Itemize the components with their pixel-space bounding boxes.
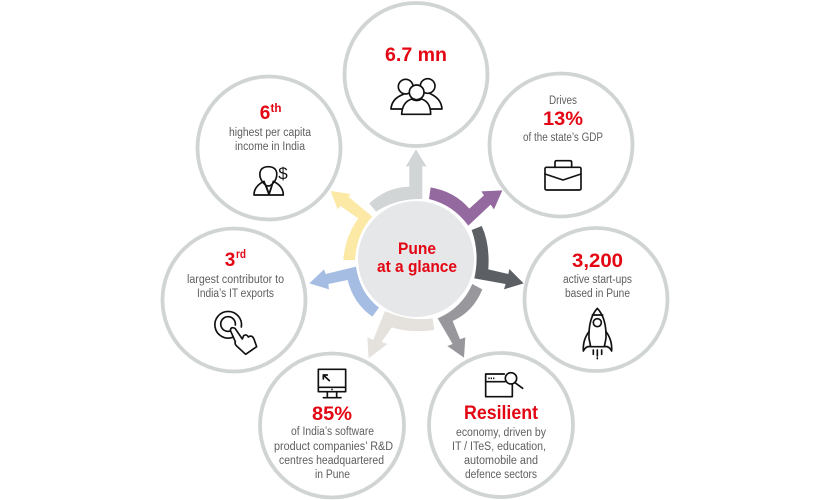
resilient text: automobile and bbox=[464, 455, 538, 467]
panel: GDP share bbox=[490, 74, 632, 216]
icon: briefcase bbox=[545, 161, 581, 190]
arrow: grey, to population bbox=[369, 149, 427, 212]
IT exports description: largest contributor to bbox=[187, 274, 284, 286]
panel: per capita income bbox=[198, 76, 340, 220]
arrows around the hub bbox=[309, 149, 524, 358]
R&D text: 85% bbox=[312, 404, 352, 425]
arrow: purple, to GDP bbox=[429, 187, 502, 226]
start-ups text: 3,200 bbox=[572, 251, 623, 272]
GDP ring bbox=[490, 74, 632, 216]
hub title bbox=[377, 240, 457, 276]
income description: income in India bbox=[235, 141, 306, 153]
IT exports description: India’s IT exports bbox=[197, 288, 274, 300]
income ring bbox=[198, 76, 340, 220]
icon: touch gesture bbox=[215, 311, 257, 354]
start-ups text: based in Pune bbox=[565, 288, 630, 300]
R&D text: in Pune bbox=[315, 469, 350, 481]
hub title: at a glance bbox=[377, 258, 457, 276]
R&D text: product companies’ R&D bbox=[274, 441, 393, 453]
icon: monitor bbox=[318, 369, 346, 398]
R&D text: of India’s software bbox=[291, 426, 374, 438]
resilient text: Resilient bbox=[464, 403, 539, 424]
central hub bbox=[358, 201, 474, 317]
population figure: 6.7 mn bbox=[385, 45, 447, 66]
resilient ring bbox=[429, 353, 573, 497]
IT exports rank bbox=[225, 247, 246, 271]
income rank: th bbox=[270, 101, 282, 115]
panel: start-ups bbox=[524, 228, 668, 371]
panel: IT exports bbox=[162, 228, 306, 372]
income description: highest per capita bbox=[229, 127, 312, 139]
icon: people bbox=[391, 79, 442, 114]
GDP text: 13% bbox=[543, 109, 583, 130]
arrow: yellow, to income bbox=[331, 191, 372, 260]
arrow: charcoal, to start-ups bbox=[472, 226, 524, 289]
IT exports rank: 3 bbox=[225, 250, 235, 271]
resilient text: IT / ITeS, education, bbox=[452, 441, 546, 453]
panel: software R&D centres bbox=[260, 354, 404, 498]
IT exports ring bbox=[162, 228, 306, 372]
resilient text bbox=[452, 403, 546, 481]
icon: businessman with dollar bbox=[254, 164, 288, 195]
start-ups text bbox=[563, 251, 632, 300]
GDP text bbox=[523, 95, 603, 144]
income rank bbox=[260, 101, 282, 124]
arrow: mid grey, to resilient economy bbox=[438, 284, 482, 358]
hub disc bbox=[358, 201, 474, 317]
IT exports rank: rd bbox=[236, 247, 246, 261]
R&D text: centres headquartered bbox=[279, 455, 384, 467]
panel: resilient economy bbox=[429, 353, 573, 497]
arrow: beige, to R&D centres bbox=[367, 311, 434, 358]
R&D text bbox=[274, 404, 393, 481]
start-ups text: active start-ups bbox=[563, 274, 632, 286]
population ring bbox=[344, 3, 488, 146]
GDP text: of the state’s GDP bbox=[523, 132, 603, 144]
icon: businessman with dollar: $ bbox=[278, 164, 288, 183]
resilient text: economy, driven by bbox=[456, 427, 546, 439]
resilient text: defence sectors bbox=[465, 469, 537, 481]
start-ups ring bbox=[524, 228, 668, 371]
icon: rocket bbox=[583, 308, 612, 359]
R&D ring bbox=[260, 354, 404, 498]
icon: browser and magnifier bbox=[486, 373, 523, 397]
arrow: blue, to IT exports bbox=[309, 267, 379, 317]
income rank: 6 bbox=[260, 103, 270, 124]
hub title: Pune bbox=[398, 240, 436, 258]
GDP text: Drives bbox=[549, 95, 577, 107]
income description bbox=[229, 127, 312, 153]
panel: population bbox=[344, 3, 488, 146]
IT exports description bbox=[187, 274, 284, 300]
